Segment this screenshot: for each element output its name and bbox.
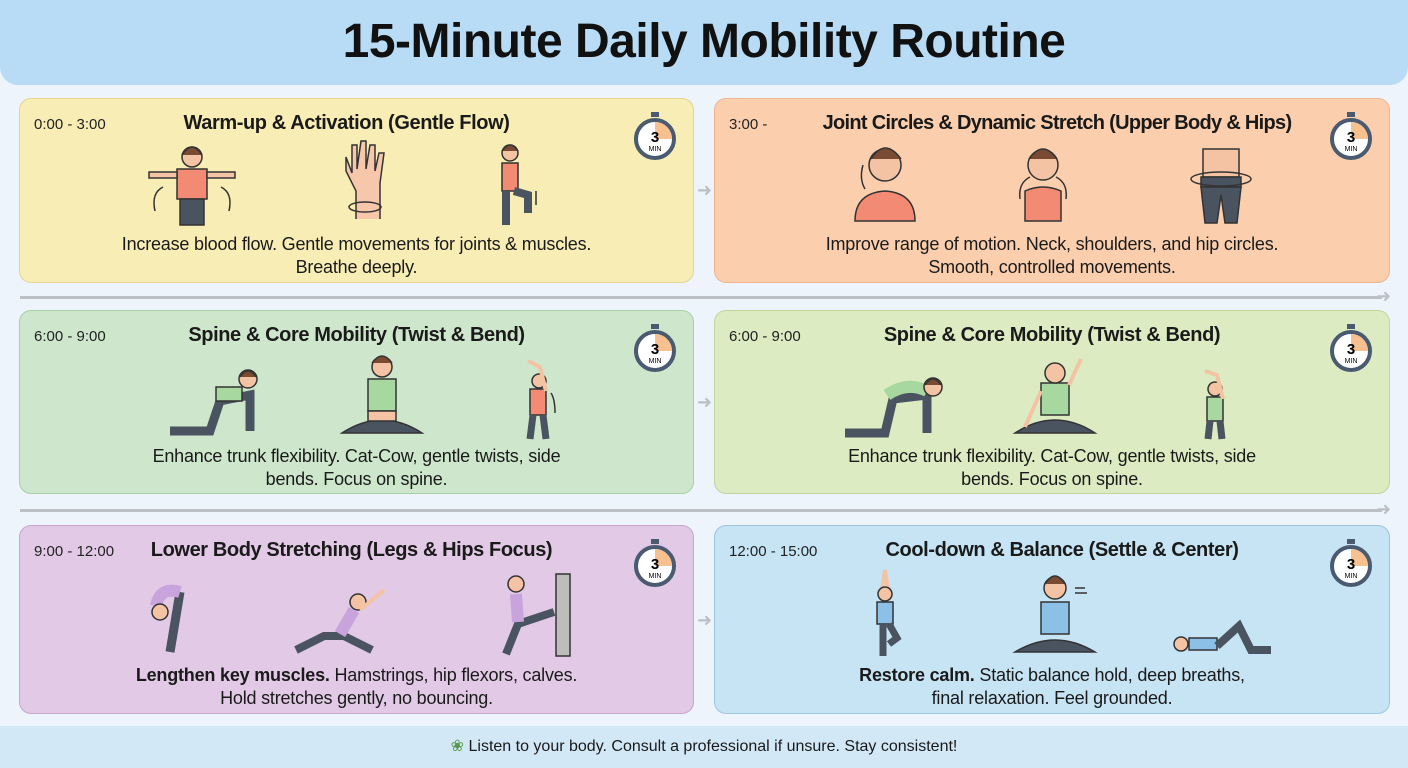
text: ➜ <box>1376 499 1391 519</box>
description <box>826 234 1278 277</box>
arrow: row3: ➜ <box>697 610 712 630</box>
arrow: timeline 2 <box>20 509 1382 512</box>
panel: joint circles: 3:00 - <box>729 116 767 133</box>
description: bends. Focus on spine. <box>961 469 1143 489</box>
text: ➜ <box>1376 286 1391 306</box>
description: Increase blood flow. Gentle movements for joints & muscles. <box>122 234 591 254</box>
description: bends. Focus on spine. <box>266 469 447 489</box>
icon: stopwatch <box>634 324 676 372</box>
description: Breathe deeply. <box>296 257 417 277</box>
heading: warm-up: Warm-up & Activation (Gentle Flow) <box>183 112 510 134</box>
icon: stopwatch: 3 <box>651 556 659 573</box>
heading: spine left: Spine & Core Mobility (Twist & Bend) <box>188 324 525 346</box>
panel: warm-up <box>19 98 694 283</box>
icon: stopwatch <box>634 112 676 160</box>
icon: stopwatch: 3 <box>651 129 659 146</box>
icon: stopwatch: 3 <box>1347 129 1355 146</box>
icon: stopwatch <box>1330 539 1372 587</box>
title banner: 15-Minute Daily Mobility Routine <box>343 15 1065 68</box>
heading: joint circles: Joint Circles & Dynamic Stretch (Upper Body & Hips) <box>823 112 1291 134</box>
description <box>848 446 1256 489</box>
description: Restore calm. Static balance hold, deep breaths, <box>859 665 1245 685</box>
description: Enhance trunk flexibility. Cat-Cow, gentle twists, side <box>848 446 1256 466</box>
heading: lower body: Lower Body Stretching (Legs & Hips Focus) <box>151 539 552 561</box>
description: Enhance trunk flexibility. Cat-Cow, gentle twists, side <box>153 446 560 466</box>
panel: joint circles <box>714 98 1390 283</box>
icon: stopwatch <box>1330 112 1372 160</box>
description <box>136 665 577 708</box>
icon: stopwatch: MIN <box>1345 358 1357 365</box>
panel: cool-down: 12:00 - 15:00 <box>729 543 817 560</box>
illustrations: cool-down <box>876 570 1271 656</box>
icon: stopwatch <box>1330 324 1372 372</box>
illustrations: spine right <box>845 358 1226 440</box>
panel: spine right <box>714 310 1390 494</box>
arrow: row1: ➜ <box>697 180 712 200</box>
description: Hold stretches gently, no bouncing. <box>220 688 493 708</box>
icon: stopwatch <box>634 539 676 587</box>
description: Lengthen key muscles. Hamstrings, hip flexors, calves. <box>136 665 577 685</box>
heading: spine right: Spine & Core Mobility (Twist & Bend) <box>884 324 1220 346</box>
description: final relaxation. Feel grounded. <box>932 688 1172 708</box>
icon: stopwatch: MIN <box>1345 146 1357 153</box>
icon: stopwatch: 3 <box>1347 556 1355 573</box>
icon: stopwatch: MIN <box>649 573 661 580</box>
footer <box>0 726 1408 768</box>
arrow: timeline 1 <box>20 296 1382 299</box>
arrow: row2: ➜ <box>697 392 712 412</box>
icon: stopwatch: MIN <box>1345 573 1357 580</box>
illustrations: spine left <box>170 355 556 440</box>
illustrations: joint circles <box>854 147 1252 224</box>
icon: stopwatch: 3 <box>1347 341 1355 358</box>
footer: ❀ Listen to your body. Consult a professional if unsure. Stay consistent! <box>451 738 957 755</box>
icon: stopwatch: MIN <box>649 358 661 365</box>
description <box>122 234 591 277</box>
panel: warm-up: 0:00 - 3:00 <box>34 116 106 133</box>
panel: spine left <box>19 310 694 494</box>
icon: stopwatch: MIN <box>649 146 661 153</box>
illustrations: warm-up <box>148 140 537 226</box>
panel: lower body <box>19 525 694 714</box>
panel: lower body: 9:00 - 12:00 <box>34 543 114 560</box>
panel: spine left: 6:00 - 9:00 <box>34 328 106 345</box>
description: Improve range of motion. Neck, shoulders, and hip circles. <box>826 234 1278 254</box>
panel: cool-down <box>714 525 1390 714</box>
description: Smooth, controlled movements. <box>928 257 1176 277</box>
title banner <box>0 0 1408 85</box>
description <box>153 446 560 489</box>
illustrations: lower body <box>150 573 571 657</box>
description <box>859 665 1245 708</box>
icon: stopwatch: 3 <box>651 341 659 358</box>
heading: cool-down: Cool-down & Balance (Settle & Center) <box>885 539 1238 561</box>
panel: spine right: 6:00 - 9:00 <box>729 328 801 345</box>
